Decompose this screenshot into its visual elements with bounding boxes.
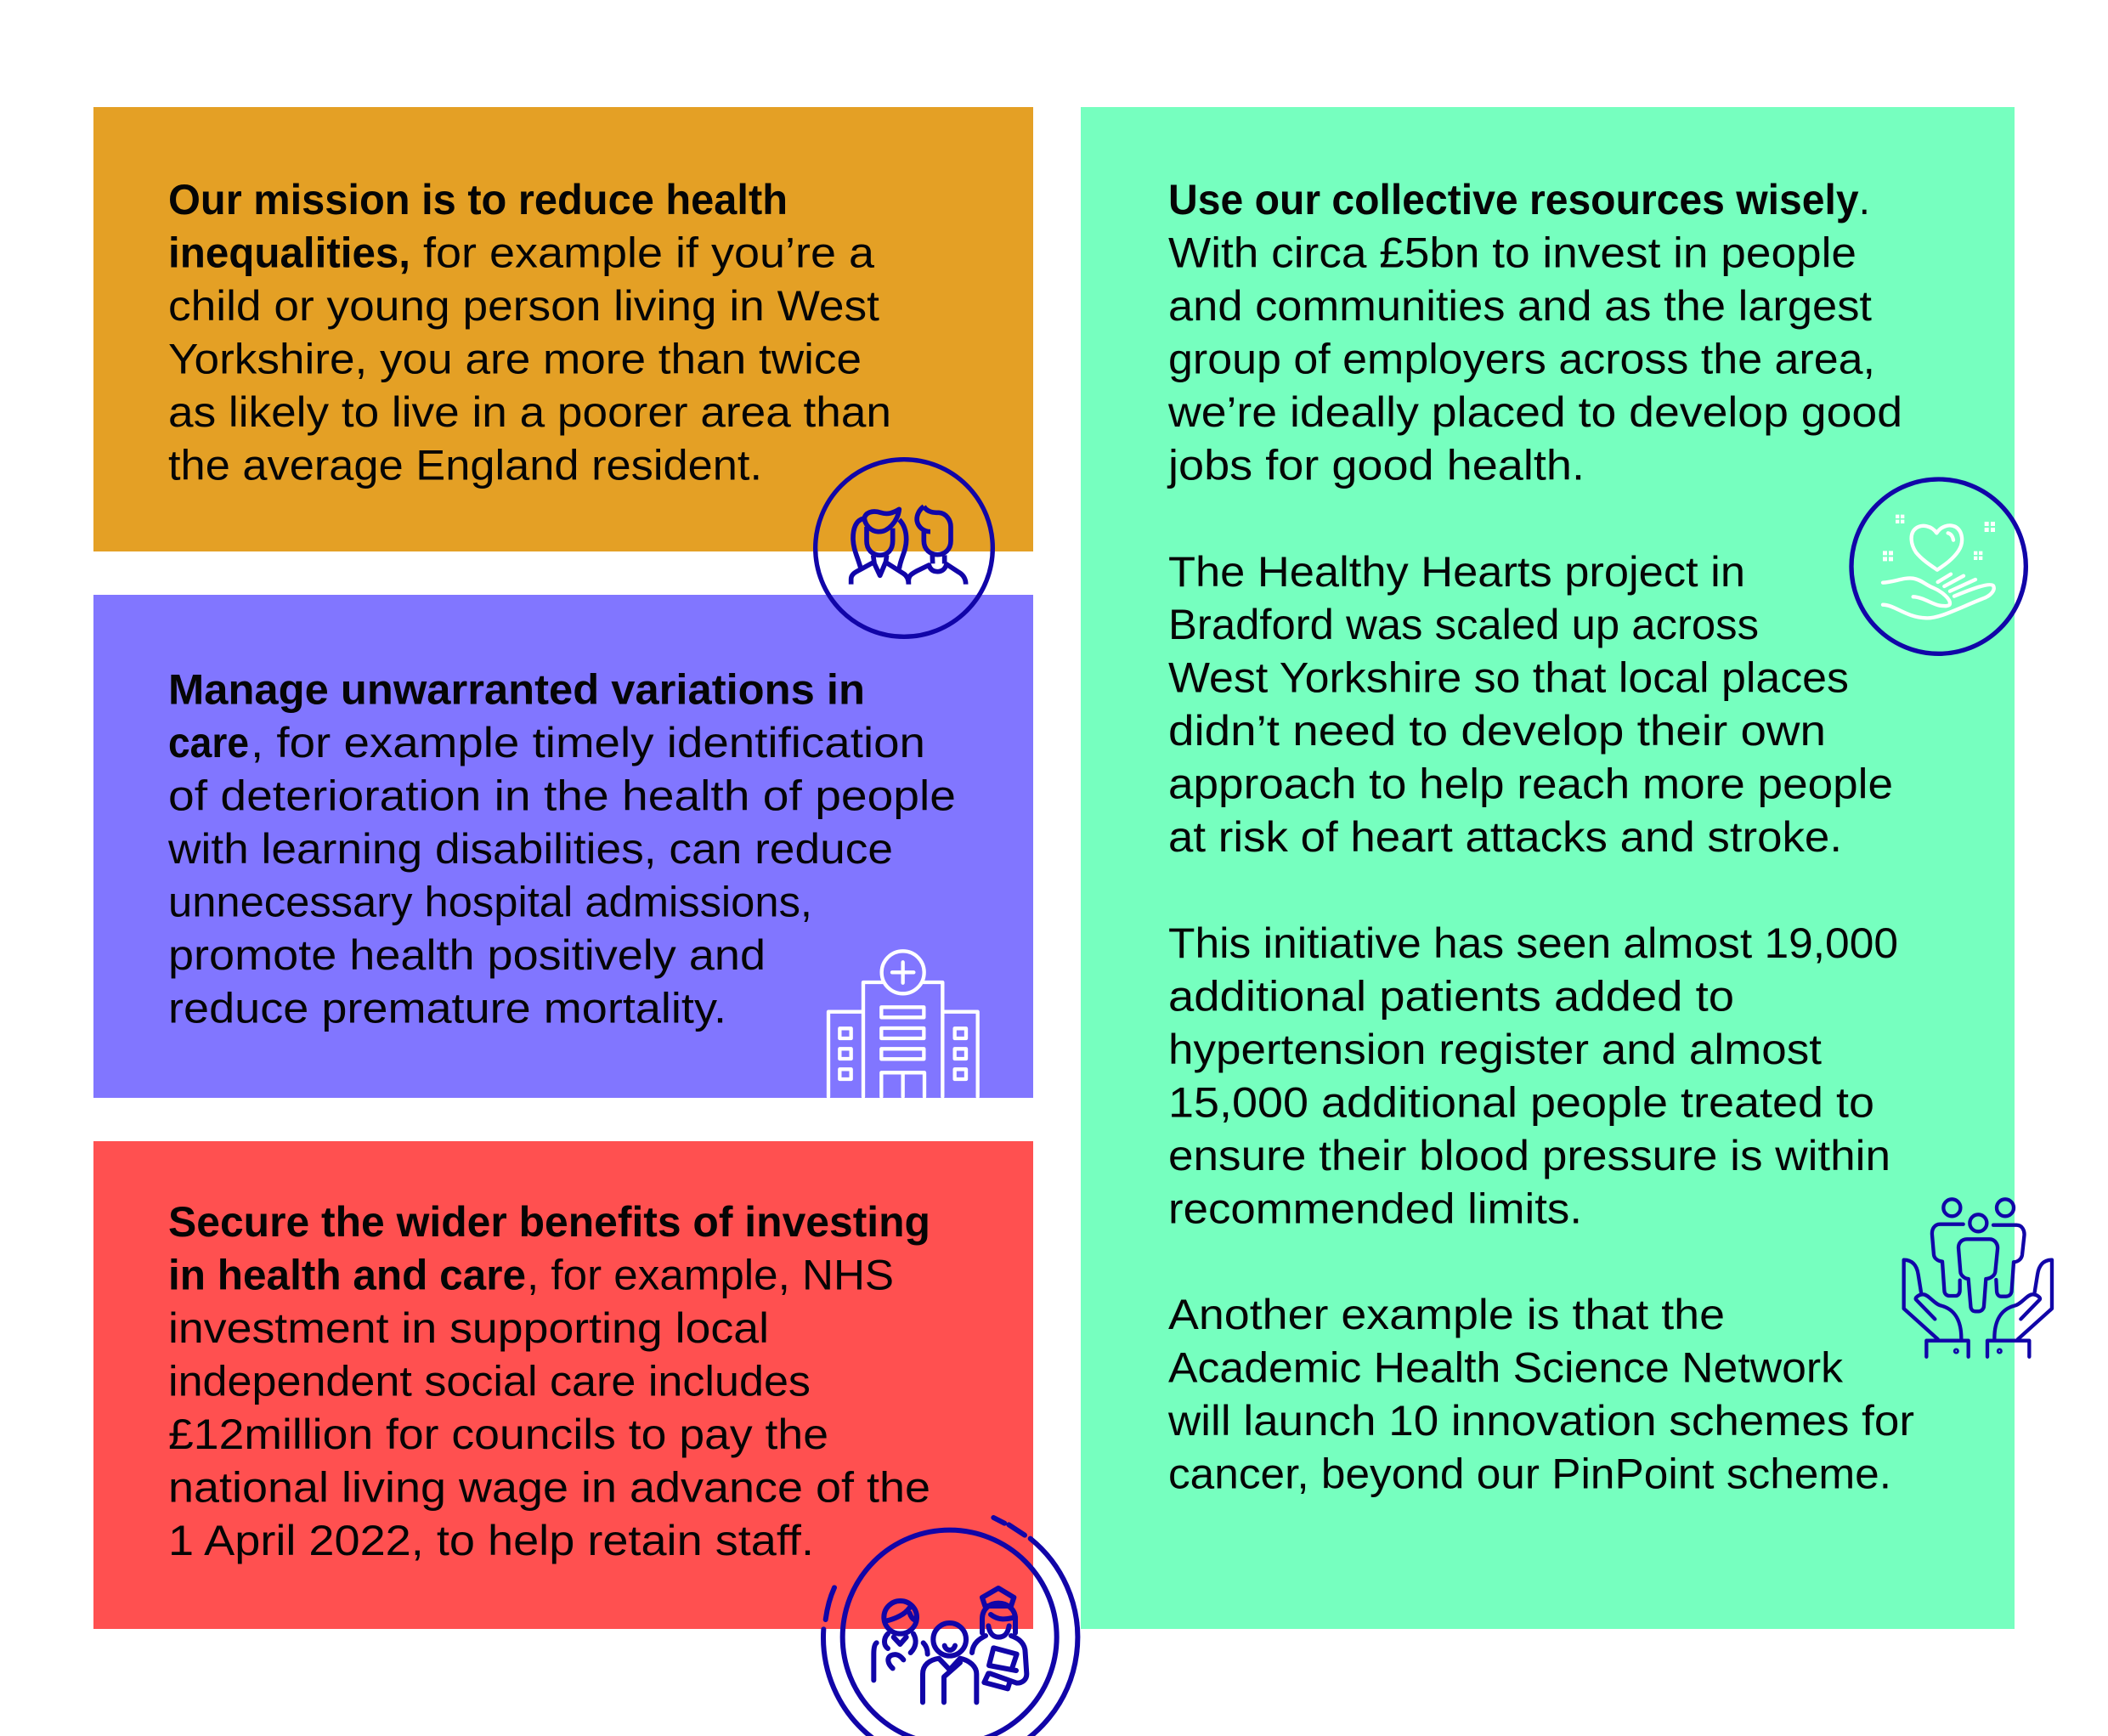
text: collective resources: group of employers across the area, xyxy=(1168,335,1875,382)
icon: heart over open hand in circle xyxy=(1851,479,2026,653)
text: Healthy Hearts project: didn’t need to develop their own xyxy=(1168,707,1826,755)
text: collective resources xyxy=(1167,176,1902,489)
text: initiative results: recommended limits. xyxy=(1168,1185,1582,1232)
text: mission statement: Our mission is to reduce health xyxy=(168,176,788,223)
text: secure wider benefits: Secure the wider benefits of investing xyxy=(168,1198,930,1246)
text: innovation schemes: will launch 10 innovation schemes for xyxy=(1167,1397,1914,1445)
text: initiative results: 15,000 additional people treated to xyxy=(1168,1079,1874,1127)
text: collective resources: and communities and as the largest xyxy=(1168,282,1872,330)
text: mission statement xyxy=(168,176,891,489)
text: Healthy Hearts project: at risk of heart attacks and stroke. xyxy=(1168,813,1842,861)
icon: doctor, patient and graduate in double circle xyxy=(823,1518,1077,1736)
text: collective resources: Use our collective resources wisely. xyxy=(1168,176,1870,223)
panel: unwarranted variations in care xyxy=(93,595,1033,1098)
text: mission statement: as likely to live in a poorer area than xyxy=(168,388,891,436)
text: Healthy Hearts project: Bradford was scaled up across xyxy=(1168,601,1759,648)
text: secure wider benefits: £12million for councils to pay the xyxy=(168,1411,828,1458)
text: Healthy Hearts project: approach to help reach more people xyxy=(1168,760,1893,807)
text: secure wider benefits: in health and care xyxy=(168,1251,526,1298)
text: manage variations xyxy=(167,666,956,1032)
text: collective resources: we’re ideally placed to develop good xyxy=(1167,388,1902,436)
text: initiative results: ensure their blood pressure is within xyxy=(1168,1132,1890,1179)
text: manage variations: , for example timely identification xyxy=(251,719,925,766)
text: collective resources: With circa £5bn to invest in people xyxy=(1168,229,1857,276)
text: manage variations: promote health positively and xyxy=(168,931,766,979)
text: innovation schemes: Another example is that the xyxy=(1168,1291,1725,1338)
graduate figure xyxy=(972,1588,1026,1688)
icon: hands holding people xyxy=(1904,1199,2052,1357)
text: initiative results: hypertension register and almost xyxy=(1168,1026,1822,1073)
text: initiative results xyxy=(1168,919,1898,1232)
icon: hospital building xyxy=(828,951,978,1097)
text: collective resources: jobs for good health. xyxy=(1167,442,1585,489)
text: secure wider benefits: independent social care includes xyxy=(168,1358,811,1405)
text: manage variations: care xyxy=(168,719,249,766)
icon: two people in circle xyxy=(816,460,992,636)
text: manage variations: with learning disabilities, can reduce xyxy=(167,825,893,873)
text: mission statement: inequalities, xyxy=(168,229,410,277)
text: Healthy Hearts project xyxy=(1168,548,1893,861)
text: innovation schemes: cancer, beyond our PinPoint scheme. xyxy=(1168,1450,1891,1497)
text: secure wider benefits: national living wage in advance of the xyxy=(168,1463,930,1511)
panel: wider benefits of investing xyxy=(93,1141,1033,1629)
text: Healthy Hearts project: The Healthy Hearts project in xyxy=(1168,548,1745,596)
text: manage variations: unnecessary hospital admissions, xyxy=(168,879,812,926)
text: secure wider benefits xyxy=(168,1198,930,1564)
text: innovation schemes xyxy=(1167,1291,1914,1497)
text: Healthy Hearts project: West Yorkshire so that local places xyxy=(1168,654,1849,702)
text: mission statement: child or young person living in West xyxy=(168,282,879,330)
left hand xyxy=(1904,1260,1969,1357)
text: manage variations: of deterioration in the health of people xyxy=(168,772,956,819)
sparkle dots xyxy=(1883,515,1995,561)
text: secure wider benefits: , for example, NHS xyxy=(527,1251,894,1298)
panel: use collective resources xyxy=(1081,107,2015,1629)
text: mission statement: for example if you’re a xyxy=(423,229,874,277)
text: secure wider benefits: 1 April 2022, to help retain staff. xyxy=(168,1517,814,1564)
text: manage variations: reduce premature mortality. xyxy=(168,984,726,1032)
text: mission statement: Yorkshire, you are more than twice xyxy=(168,335,862,382)
panel: reduce health inequalities xyxy=(93,107,1033,551)
doctor figure xyxy=(873,1601,928,1680)
central person xyxy=(923,1623,976,1702)
right hand xyxy=(1987,1260,2052,1357)
text: mission statement: the average England resident. xyxy=(168,442,762,489)
text: innovation schemes: Academic Health Science Network xyxy=(1168,1344,1844,1392)
text: initiative results: additional patients added to xyxy=(1168,972,1734,1020)
text: secure wider benefits: investment in supporting local xyxy=(168,1304,769,1352)
text: initiative results: This initiative has seen almost 19,000 xyxy=(1168,919,1898,967)
text: manage variations: Manage unwarranted variations in xyxy=(168,666,865,714)
